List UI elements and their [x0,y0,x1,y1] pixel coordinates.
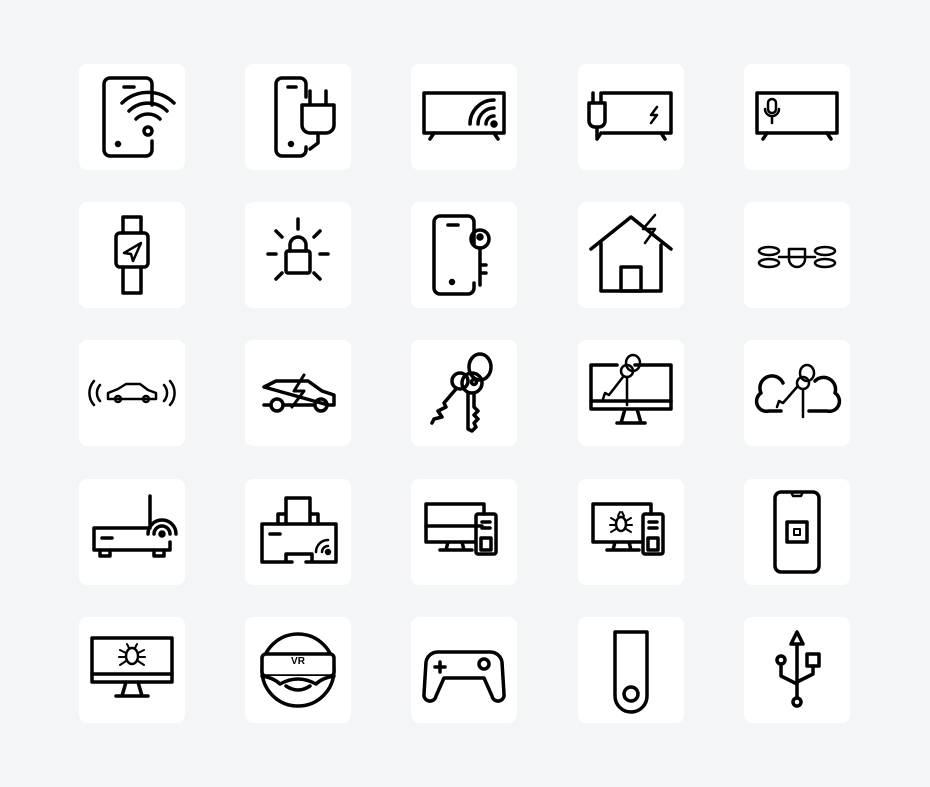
icon card: router [79,479,185,585]
icon card: house lightning [578,202,684,308]
icon card: electric car [245,340,351,446]
icon card: monitor keys [578,340,684,446]
icon card: monitor bug [79,617,185,723]
icon card: USB symbol [744,617,850,723]
icon card: printer [245,479,351,585]
icon card: phone plug [245,64,351,170]
icon card: smartwatch [79,202,185,308]
icon card: desktop computer [411,479,517,585]
icon card: desktop bug [578,479,684,585]
icon card: drone [744,202,850,308]
icon card: gamepad [411,617,517,723]
icon card: phone key [411,202,517,308]
icon card: keys [411,340,517,446]
icon card: TV wifi [411,64,517,170]
icon card: VR headset: VR [291,656,306,667]
icon card: phone square [744,479,850,585]
icon card: phone wifi [79,64,185,170]
icon card: USB stick [578,617,684,723]
icon card: TV plug [578,64,684,170]
icon card: VR headset [245,617,351,723]
icon card: cloud keys [744,340,850,446]
icon card: TV mic [744,64,850,170]
icon card: car waves [79,340,185,446]
icon card: lock alarm [245,202,351,308]
